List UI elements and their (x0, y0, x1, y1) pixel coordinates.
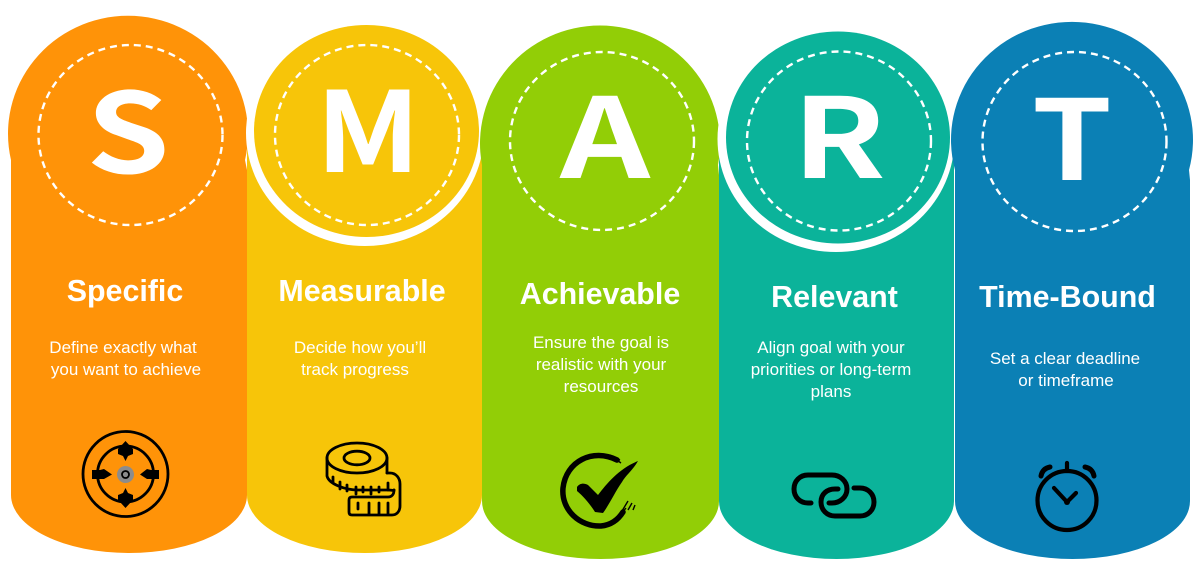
icon: chain link (794, 475, 874, 516)
description: Achievable: realistic with your (536, 355, 667, 374)
letter R: R (792, 49, 885, 210)
heading: Achievable: Achievable (520, 277, 680, 311)
panel background: green (480, 26, 720, 559)
dashed circle (747, 52, 931, 230)
panel: Specific (8, 16, 247, 553)
dashed circle (982, 52, 1166, 231)
description: Specific: you want to achieve (51, 360, 201, 379)
dashed circle (38, 45, 222, 225)
white ring (718, 26, 954, 252)
letter M: M (316, 43, 420, 204)
panel background: blue (951, 22, 1193, 559)
description: Relevant: Align goal with your (757, 338, 905, 357)
heading: Time-Bound: Time-Bound (979, 280, 1156, 314)
letter A: A (560, 49, 650, 210)
description: Achievable: resources (564, 377, 638, 396)
icon: stopwatch (1038, 463, 1096, 530)
heading: Specific: Specific (67, 274, 183, 308)
panel background: orange (8, 16, 248, 553)
description: Measurable: track progress (301, 360, 409, 379)
white ring (246, 20, 484, 246)
panel: Relevant (718, 32, 954, 559)
icon: tape measure (327, 443, 400, 515)
dashed circle (510, 52, 694, 230)
panel: Time-Bound (951, 22, 1193, 559)
dashed circle (275, 45, 459, 225)
description: Achievable: Ensure the goal is (533, 333, 669, 352)
description: Relevant: priorities or long-term (751, 360, 911, 379)
panel background: yellow (247, 133, 482, 553)
description: Measurable: Decide how you’ll (294, 338, 426, 357)
badge circle: yellow (254, 25, 479, 237)
badge circle: teal (726, 32, 950, 244)
icon: check mark (563, 455, 638, 526)
description: Time-Bound: Set a clear deadline (990, 349, 1140, 368)
panel background: teal (719, 139, 954, 559)
heading: Relevant: Relevant (771, 280, 898, 314)
icon: target (83, 432, 168, 516)
description: Time-Bound: or timeframe (1018, 371, 1114, 390)
description: Relevant: plans (811, 382, 851, 401)
description: Specific: Define exactly what (49, 338, 197, 357)
heading: Measurable: Measurable (278, 274, 446, 308)
letter T: T (1032, 51, 1112, 212)
panel: Measurable (246, 25, 482, 553)
letter S: S (86, 44, 170, 205)
panel: Achievable (480, 26, 719, 559)
